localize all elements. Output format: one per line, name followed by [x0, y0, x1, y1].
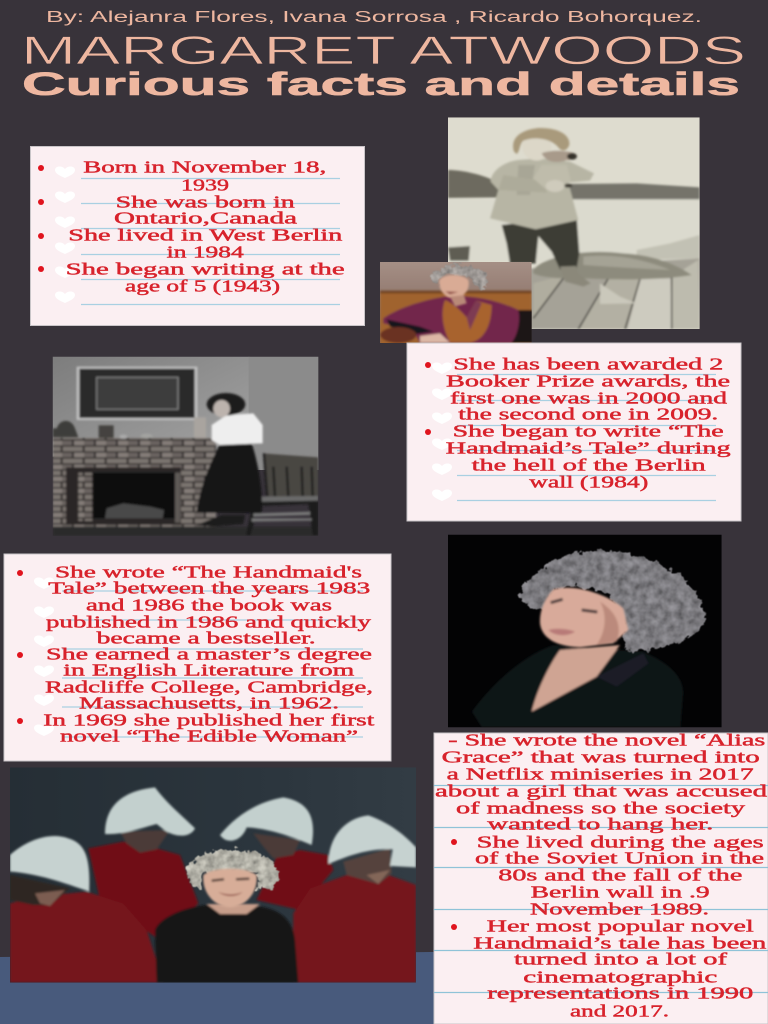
panel: novels and historical context: of the Soviet Union in the	[475, 848, 764, 868]
photo: older portrait against black background	[448, 535, 722, 727]
panel: early life facts: She began writing at the	[66, 260, 345, 278]
panel: awards and The Handmaid's Tale: the hell of the Berlin	[472, 456, 706, 474]
panel: novels and historical context: about a girl that was accused	[435, 782, 768, 800]
panel: novels and historical context	[434, 730, 768, 1024]
panel: writing career facts: She wrote “The Handmaid's	[55, 562, 362, 582]
panel: early life facts: 1939	[181, 176, 229, 194]
panel: awards and The Handmaid's Tale: She began to write “The	[453, 422, 724, 440]
title: MARGARET ATWOODS	[21, 29, 746, 73]
panel: novels and historical context: Handmaid’s tale has been	[473, 934, 766, 952]
panel: novels and historical context: She lived during the ages	[477, 832, 764, 852]
panel: awards and The Handmaid's Tale: wall (1984)	[529, 472, 648, 492]
panel: novels and historical context: Grace” that was turned into	[442, 748, 760, 766]
panel: early life facts: age of 5 (1943)	[125, 276, 280, 296]
panel: novels and historical context: and 2017.	[570, 1002, 669, 1020]
panel: early life facts	[30, 146, 364, 326]
panel: writing career facts: in English Literature from	[63, 660, 355, 680]
panel: novels and historical context: representations in 1990	[487, 984, 753, 1002]
panel: writing career facts: Tale” between the years 1983	[48, 578, 370, 598]
panel: novels and historical context: - She wrote the novel “Alias	[448, 730, 765, 750]
panel: awards and The Handmaid's Tale: Handmaid’s Tale” during	[446, 438, 731, 458]
panel: novels and historical context: 80s and the fall of the	[498, 866, 742, 884]
panel: early life facts: She lived in West Berlin	[68, 226, 342, 244]
panel: awards and The Handmaid's Tale: She has been awarded 2	[453, 354, 723, 374]
bottom blue band	[0, 950, 768, 1024]
byline: By: Alejanra Flores, Ivana Sorrosa , Ricardo Bohorquez.	[46, 9, 702, 26]
panel: writing career facts: published in 1986 and quickly	[46, 612, 372, 632]
photo: woman by a brick fireplace	[53, 357, 319, 536]
panel: writing career facts: became a bestseller.	[97, 628, 316, 648]
panel: writing career facts: novel “The Edible Woman”	[60, 726, 358, 746]
photo: author with four handmaids in red and white bonnets	[10, 767, 416, 983]
panel: awards and The Handmaid's Tale: Booker Prize awards, the	[446, 372, 730, 390]
panel: awards and The Handmaid's Tale: first one was in 2000 and	[450, 388, 728, 408]
photo: child on a dock with a toy	[448, 117, 700, 329]
panel: writing career facts: and 1986 the book was	[86, 596, 332, 614]
panel: writing career facts: Radcliffe College, Cambridge,	[45, 678, 373, 696]
subtitle: Curious facts and details	[22, 66, 740, 102]
panel: writing career facts	[4, 554, 391, 761]
panel: novels and historical context: Her most popular novel	[487, 916, 754, 936]
panel: novels and historical context: cinematographic	[523, 968, 717, 986]
panel: awards and The Handmaid's Tale: the second one in 2009.	[458, 404, 718, 424]
photo: seated portrait with purple shawl	[380, 262, 535, 346]
panel: writing career facts: Massachusetts, in 1962.	[79, 694, 339, 712]
panel: writing career facts: She earned a master’s degree	[46, 644, 372, 664]
panel: novels and historical context: Berlin wall in .9	[531, 882, 710, 902]
panel: novels and historical context: November 1989.	[530, 900, 709, 918]
panel: writing career facts: In 1969 she published her first	[43, 710, 375, 730]
panel: early life facts: in 1984	[167, 242, 244, 262]
panel: awards and The Handmaid's Tale	[407, 343, 741, 521]
panel: early life facts: She was born in	[116, 192, 295, 212]
panel: novels and historical context: turned into a lot of	[514, 950, 728, 968]
panel: novels and historical context: of madness so the society	[456, 798, 746, 818]
panel: early life facts: Ontario,Canada	[114, 208, 298, 228]
panel: novels and historical context: wanted to hang her.	[487, 814, 713, 834]
panel: early life facts: Born in November 18,	[83, 158, 326, 176]
panel: novels and historical context: a Netflix miniseries in 2017	[447, 764, 754, 784]
